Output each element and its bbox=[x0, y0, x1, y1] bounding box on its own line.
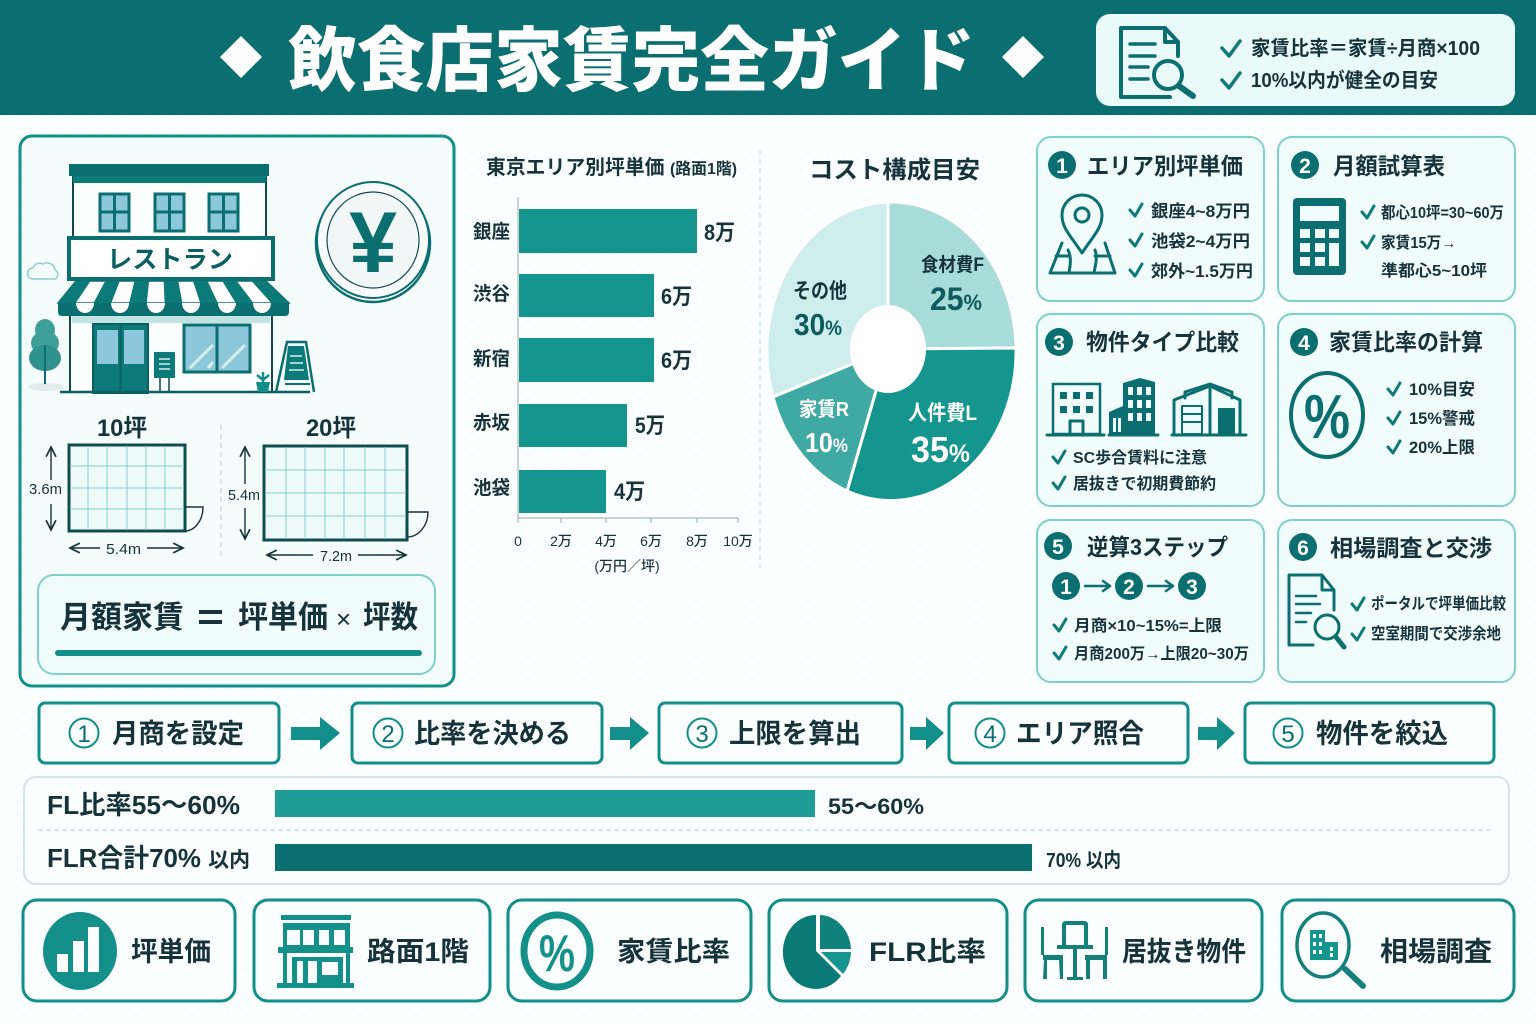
heading: 相場調査と交渉 bbox=[1330, 535, 1492, 561]
icon: storefront bbox=[277, 915, 354, 988]
checklist: 準都心5~10坪 bbox=[1381, 261, 1487, 280]
keyword tile: FLR ratio bbox=[769, 900, 1007, 1001]
keyword tile: rent ratio: 家賃比率 bbox=[617, 937, 730, 967]
bars bbox=[519, 209, 697, 513]
checklist bbox=[1388, 380, 1475, 457]
category labels: 新宿 bbox=[473, 348, 510, 370]
formula box: × bbox=[336, 604, 351, 634]
category labels: 渋谷 bbox=[473, 283, 510, 305]
pie labels: 10% bbox=[805, 427, 848, 458]
icon: document with magnifier bbox=[1289, 575, 1344, 647]
arrow bbox=[1198, 717, 1235, 750]
checklist: 郊外~1.5万円 bbox=[1151, 262, 1253, 281]
formula box: 坪単価 bbox=[238, 600, 328, 635]
heading: 逆算3ステップ bbox=[1087, 534, 1228, 560]
icon: percent bbox=[524, 915, 590, 987]
icon: left diamond bbox=[220, 36, 262, 78]
step: 5 narrow down properties bbox=[1245, 703, 1494, 763]
step: 5 narrow down properties: 物件を絞込 bbox=[1316, 719, 1448, 749]
step: 1 set monthly sales bbox=[39, 703, 279, 763]
category labels: 池袋 bbox=[473, 477, 510, 499]
badge 6: 6 bbox=[1297, 537, 1309, 560]
FL row: FL比率55〜60% bbox=[47, 790, 240, 820]
keyword tile: existing-fit property: 居抜き物件 bbox=[1122, 937, 1246, 967]
step sequence: 3 bbox=[1186, 576, 1198, 599]
value labels: 8万 bbox=[704, 220, 735, 245]
panel: 3 property types bbox=[1037, 314, 1264, 506]
keyword tile: FLR ratio: FLR比率 bbox=[869, 937, 986, 967]
icon: map pin bbox=[1050, 195, 1115, 273]
heading: 20 tsubo: 20坪 bbox=[306, 415, 356, 442]
icon: table and chairs bbox=[1041, 921, 1108, 980]
value labels: 6万 bbox=[661, 284, 692, 309]
checklist: 銀座4~8万円 bbox=[1151, 202, 1250, 221]
badge 2: 2 bbox=[1299, 155, 1311, 178]
icon: document with magnifier bbox=[1121, 28, 1193, 97]
floor plan: 10 tsubo bbox=[29, 415, 203, 558]
heading: 月額試算表 bbox=[1333, 153, 1445, 179]
badge 3: 3 bbox=[1053, 332, 1065, 355]
icon: yen coin: ¥ bbox=[349, 195, 397, 291]
FL row bbox=[47, 790, 924, 820]
checklist: 都心10坪=30~60万 bbox=[1381, 204, 1504, 222]
FLR row: FLR合計70% 以内 bbox=[47, 843, 250, 873]
badge 4: 4 bbox=[1298, 332, 1310, 355]
keyword tile: price per tsubo bbox=[23, 900, 235, 1001]
axis labels: 0 bbox=[514, 533, 522, 549]
checklist bbox=[1352, 594, 1506, 643]
floor plan: 20 tsubo: 7.2m bbox=[320, 548, 352, 565]
pie labels bbox=[793, 254, 984, 470]
FLR row bbox=[47, 843, 1121, 873]
checklist bbox=[1054, 617, 1249, 663]
checklist: 居抜きで初期費節約 bbox=[1073, 474, 1216, 493]
step: 4 check area: エリア照合 bbox=[1016, 719, 1144, 749]
keyword tile: street-level first floor: 路面1階 bbox=[367, 937, 469, 967]
checklist: 月商×10~15%=上限 bbox=[1074, 617, 1222, 635]
step: 2 decide ratio bbox=[352, 703, 602, 763]
heading: 10 tsubo: 10坪 bbox=[97, 415, 147, 442]
pie labels: 30% bbox=[794, 307, 842, 342]
step sequence bbox=[1052, 572, 1206, 600]
pie labels: 35% bbox=[911, 429, 970, 470]
panel: 5 reverse calculation steps bbox=[1037, 520, 1264, 682]
icon: tree bbox=[28, 319, 64, 391]
axis labels: (万円／坪) bbox=[594, 558, 660, 574]
badge 1 bbox=[1048, 151, 1076, 179]
keyword tile: existing-fit property bbox=[1025, 900, 1262, 1001]
axis labels: 2万 bbox=[550, 533, 572, 549]
axis labels: 4万 bbox=[595, 533, 617, 549]
icon: percent: % bbox=[539, 925, 575, 983]
checklist: 月商200万→上限20~30万 bbox=[1074, 645, 1249, 663]
panel: FL and FLR ratios bbox=[24, 777, 1509, 884]
axis labels bbox=[514, 533, 753, 574]
FL row: 55〜60% bbox=[828, 794, 924, 819]
header band bbox=[0, 0, 1536, 115]
badge 6 bbox=[1289, 533, 1317, 561]
callout: rent ratio formula bbox=[1096, 14, 1515, 106]
category labels bbox=[473, 221, 510, 499]
slice: labour cost bbox=[847, 348, 1016, 501]
pie labels: 家賃R bbox=[799, 398, 850, 421]
badge 1: 1 bbox=[1056, 155, 1068, 178]
slice: food cost bbox=[888, 202, 1016, 349]
panel: 6 market research and negotiation bbox=[1278, 520, 1515, 682]
icon: cloud bbox=[28, 263, 58, 279]
step: 2 decide ratio: 2 bbox=[381, 721, 395, 748]
chart title: 東京エリア別坪単価 (路面1階) bbox=[486, 156, 737, 179]
icon: three buildings bbox=[1047, 378, 1246, 435]
panel: restaurant and floor plans bbox=[20, 136, 454, 686]
pie labels: 25% bbox=[930, 281, 982, 317]
icon: restaurant building bbox=[58, 164, 314, 393]
slice: rent bbox=[773, 349, 888, 491]
floor plan: 20 tsubo: 5.4m bbox=[228, 487, 260, 504]
floor plan: 10 tsubo: 5.4m bbox=[106, 541, 141, 558]
checklist: SC歩合賃料に注意 bbox=[1073, 449, 1207, 467]
step: 3 calculate cap bbox=[659, 703, 902, 763]
arrow bbox=[610, 717, 649, 750]
axis labels: 6万 bbox=[640, 533, 662, 549]
checklist: 15%警戒 bbox=[1409, 409, 1475, 428]
pie labels: その他 bbox=[793, 280, 847, 303]
step: 2 decide ratio: 比率を決める bbox=[414, 719, 571, 749]
arrow bbox=[910, 717, 944, 750]
check list: 家賃比率＝家賃÷月商×100 bbox=[1251, 37, 1480, 60]
badge 5: 5 bbox=[1052, 536, 1064, 559]
badge 3 bbox=[1045, 328, 1073, 356]
checklist: ポータルで坪単価比較 bbox=[1371, 594, 1506, 613]
pie chart: cost composition bbox=[767, 157, 1016, 501]
panel: 2 monthly estimate bbox=[1278, 137, 1515, 301]
step: 3 calculate cap: 上限を算出 bbox=[729, 719, 861, 749]
value labels: 6万 bbox=[661, 348, 692, 373]
axis labels: 8万 bbox=[686, 533, 708, 549]
panel: 4 rent ratio calculation bbox=[1278, 314, 1515, 506]
keyword tile: price per tsubo: 坪単価 bbox=[131, 937, 211, 967]
step: 3 calculate cap: 3 bbox=[695, 721, 709, 748]
FLR row: 70% 以内 bbox=[1046, 849, 1121, 872]
heading: 物件タイプ比較 bbox=[1086, 329, 1239, 355]
checklist: 空室期間で交渉余地 bbox=[1371, 624, 1501, 643]
panel: 1 area price bbox=[1037, 137, 1264, 301]
category labels: 銀座 bbox=[473, 221, 510, 243]
icon: percent circle bbox=[1291, 373, 1363, 457]
checklist: 家賃15万→ bbox=[1381, 234, 1456, 252]
bar chart: Tokyo area price per tsubo bbox=[473, 156, 753, 574]
title: 飲食店家賃完全ガイド bbox=[288, 22, 975, 100]
heading: エリア別坪単価 bbox=[1087, 153, 1243, 179]
formula box bbox=[38, 575, 435, 674]
pie labels: 食材費F bbox=[921, 254, 984, 276]
checklist bbox=[1053, 449, 1216, 493]
icon: bar chart circle bbox=[43, 912, 117, 990]
arrow bbox=[291, 717, 340, 750]
step: 4 check area: 4 bbox=[983, 721, 997, 748]
heading: 家賃比率の計算 bbox=[1329, 329, 1483, 355]
icon: calculator bbox=[1293, 198, 1346, 275]
checklist: 20%上限 bbox=[1409, 438, 1475, 457]
icon: yen coin bbox=[316, 182, 430, 302]
icon: magnifier on building bbox=[1297, 913, 1363, 986]
icon: right diamond bbox=[1002, 36, 1044, 78]
checklist: 池袋2~4万円 bbox=[1151, 232, 1250, 251]
keyword tile: rent ratio bbox=[508, 900, 751, 1001]
axis labels: 10万 bbox=[723, 533, 753, 549]
step: 5 narrow down properties: 5 bbox=[1281, 721, 1295, 748]
value labels: 5万 bbox=[635, 413, 665, 438]
checklist bbox=[1130, 202, 1253, 281]
check list bbox=[1222, 37, 1480, 92]
step: 1 set monthly sales: 1 bbox=[77, 721, 91, 748]
keyword tile: market research bbox=[1282, 900, 1514, 1001]
keyword tile: market research: 相場調査 bbox=[1380, 937, 1492, 967]
sign text: レストラン bbox=[107, 246, 233, 274]
badge 5 bbox=[1044, 532, 1072, 560]
category labels: 赤坂 bbox=[473, 412, 510, 434]
step sequence: 1 bbox=[1060, 576, 1072, 599]
value labels: 4万 bbox=[614, 479, 645, 504]
step: 4 check area bbox=[949, 703, 1188, 763]
pie labels: 人件費L bbox=[908, 402, 977, 425]
floor plan: 20 tsubo bbox=[228, 415, 428, 565]
checklist: 10%目安 bbox=[1409, 380, 1475, 399]
badge 2 bbox=[1291, 151, 1319, 179]
step: 1 set monthly sales: 月商を設定 bbox=[112, 719, 244, 749]
keyword tile: street-level first floor bbox=[254, 900, 490, 1001]
checklist bbox=[1362, 204, 1504, 280]
badge 4 bbox=[1290, 328, 1318, 356]
icon: pie chart bbox=[783, 915, 851, 989]
icon: percent circle: % bbox=[1304, 383, 1350, 452]
slice: other bbox=[767, 202, 888, 397]
formula box: 坪数 bbox=[363, 600, 418, 635]
floor plan: 10 tsubo: 3.6m bbox=[29, 481, 62, 498]
value labels bbox=[614, 220, 735, 504]
formula box: 月額家賃 bbox=[60, 600, 184, 635]
chart title: コスト構成目安 bbox=[809, 157, 980, 184]
check list: 10%以内が健全の目安 bbox=[1251, 68, 1438, 92]
step sequence: 2 bbox=[1123, 576, 1135, 599]
